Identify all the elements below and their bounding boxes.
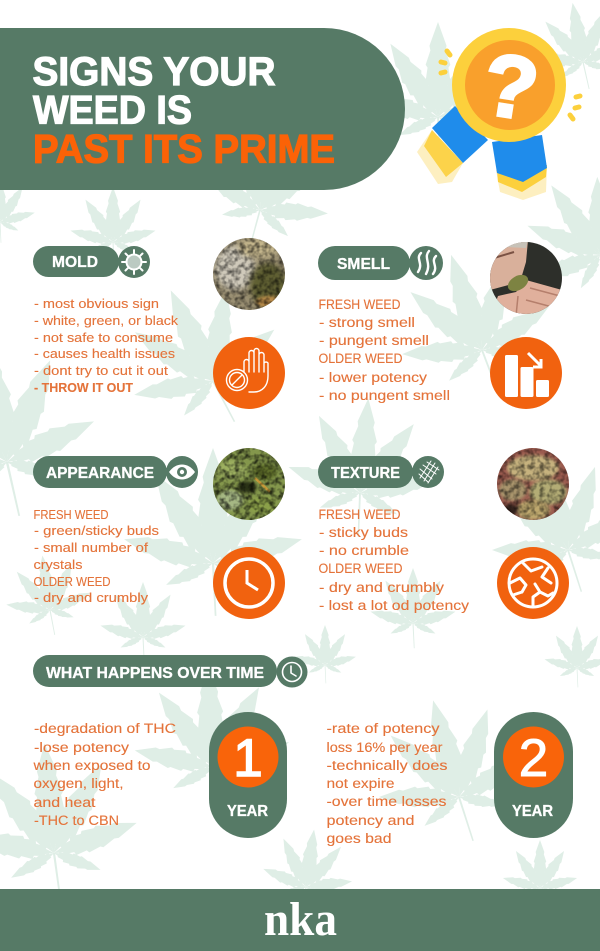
text: mold list: - not safe to consume	[34, 330, 173, 345]
title text: WEED IS	[33, 88, 192, 132]
panel: what happens over time	[32, 655, 573, 846]
icon: cracked circle	[497, 547, 569, 619]
badge: year 2: YEAR	[512, 803, 553, 820]
title text: PAST ITS PRIME	[33, 128, 335, 172]
text: year one list: -THC to CBN	[34, 813, 119, 828]
panel: mold	[33, 238, 286, 409]
text: appearance list: FRESH WEED	[34, 507, 108, 522]
text: year two list: -technically does	[326, 758, 448, 773]
heading: mold: MOLD	[52, 254, 98, 271]
text: smell list: - no pungent smell	[319, 388, 450, 403]
text: year one list: oxygen, light,	[34, 776, 124, 791]
heading: smell	[318, 246, 443, 280]
icon: medal with question mark	[417, 28, 580, 200]
heading: what happens over time	[33, 655, 308, 688]
heading: appearance	[33, 456, 198, 488]
icon: virus	[122, 250, 146, 274]
heading: smell: SMELL	[337, 256, 390, 273]
text: appearance list: - small number of	[34, 540, 149, 555]
text: mold list: - causes health issues	[34, 346, 175, 361]
footer bar	[0, 889, 600, 951]
icon: eye	[169, 464, 195, 480]
panel: appearance	[33, 448, 285, 619]
text: mold list: - THROW IT OUT	[34, 380, 133, 395]
text: appearance list	[34, 507, 159, 605]
panel: smell	[318, 240, 562, 409]
text: mold list: - white, green, or black	[34, 313, 179, 328]
text: year one list	[32, 721, 176, 828]
badge: year 2: 2	[519, 729, 548, 788]
photo: person smelling bud	[490, 242, 562, 314]
panel: texture	[318, 448, 569, 619]
text: smell list: - strong smell	[319, 315, 415, 330]
text: texture list: - lost a lot od potency	[319, 598, 469, 613]
icon: falling bar chart	[490, 337, 562, 409]
heading: what happens over time: WHAT HAPPENS OVER TIME	[46, 665, 264, 682]
badge: year 1	[209, 712, 287, 838]
text: smell list: FRESH WEED	[318, 297, 401, 312]
heading: mold	[33, 246, 150, 278]
text: mold list: - dont try to cut it out	[34, 363, 168, 378]
text: year two list: not expire	[326, 776, 394, 791]
heading: texture: TEXTURE	[331, 465, 400, 482]
text: mold list	[34, 296, 179, 395]
title text: SIGNS YOUR	[32, 50, 276, 94]
icon: medal with question mark: ?	[476, 33, 545, 140]
icon: smell waves	[418, 251, 436, 274]
photo: dried buds	[497, 448, 569, 520]
text: year two list: goes bad	[326, 831, 392, 846]
text: texture list: - no crumble	[319, 543, 409, 558]
text: appearance list: OLDER WEED	[34, 574, 110, 589]
icon: woven texture	[419, 461, 439, 483]
badge: year 1: 1	[233, 729, 263, 788]
text: texture list	[318, 507, 469, 613]
text: appearance list: - dry and crumbly	[34, 590, 149, 605]
text: smell list: - pungent smell	[319, 333, 429, 348]
text: texture list: - dry and crumbly	[319, 580, 444, 595]
icon: small clock	[282, 662, 302, 682]
text: year two list: loss 16% per year	[326, 740, 443, 755]
text: texture list: - sticky buds	[319, 525, 408, 540]
photo: moldy bud	[213, 238, 286, 310]
icon: hand and pill on orange circle	[213, 337, 285, 409]
badge: year 2	[494, 712, 573, 838]
text: year two list: potency and	[326, 813, 414, 828]
badge: year 1: YEAR	[227, 803, 268, 820]
text: smell list: - lower potency	[319, 370, 427, 385]
text: year one list: -lose potency	[34, 740, 129, 755]
text: mold list: - most obvious sign	[34, 296, 159, 311]
text: texture list: FRESH WEED	[318, 507, 401, 522]
title text	[32, 50, 335, 172]
text: year two list: -over time losses	[326, 794, 447, 809]
photo: green buds	[213, 448, 285, 520]
text: smell list	[318, 297, 450, 403]
title banner	[0, 28, 405, 190]
text: year two list: -rate of potency	[326, 721, 440, 736]
text: smell list: OLDER WEED	[318, 351, 403, 366]
heading: appearance: APPEARANCE	[46, 465, 154, 482]
text: appearance list: crystals	[34, 557, 82, 572]
text: year two list	[326, 721, 448, 846]
text: year one list: and heat	[34, 795, 96, 810]
text: year one list: -degradation of THC	[34, 721, 176, 736]
text: texture list: OLDER WEED	[318, 561, 403, 576]
text: appearance list: - green/sticky buds	[34, 523, 159, 538]
text: year one list: when exposed to	[32, 758, 150, 773]
logo: nka	[264, 893, 337, 946]
icon: clock on orange circle	[213, 547, 285, 619]
heading: texture	[318, 456, 444, 488]
